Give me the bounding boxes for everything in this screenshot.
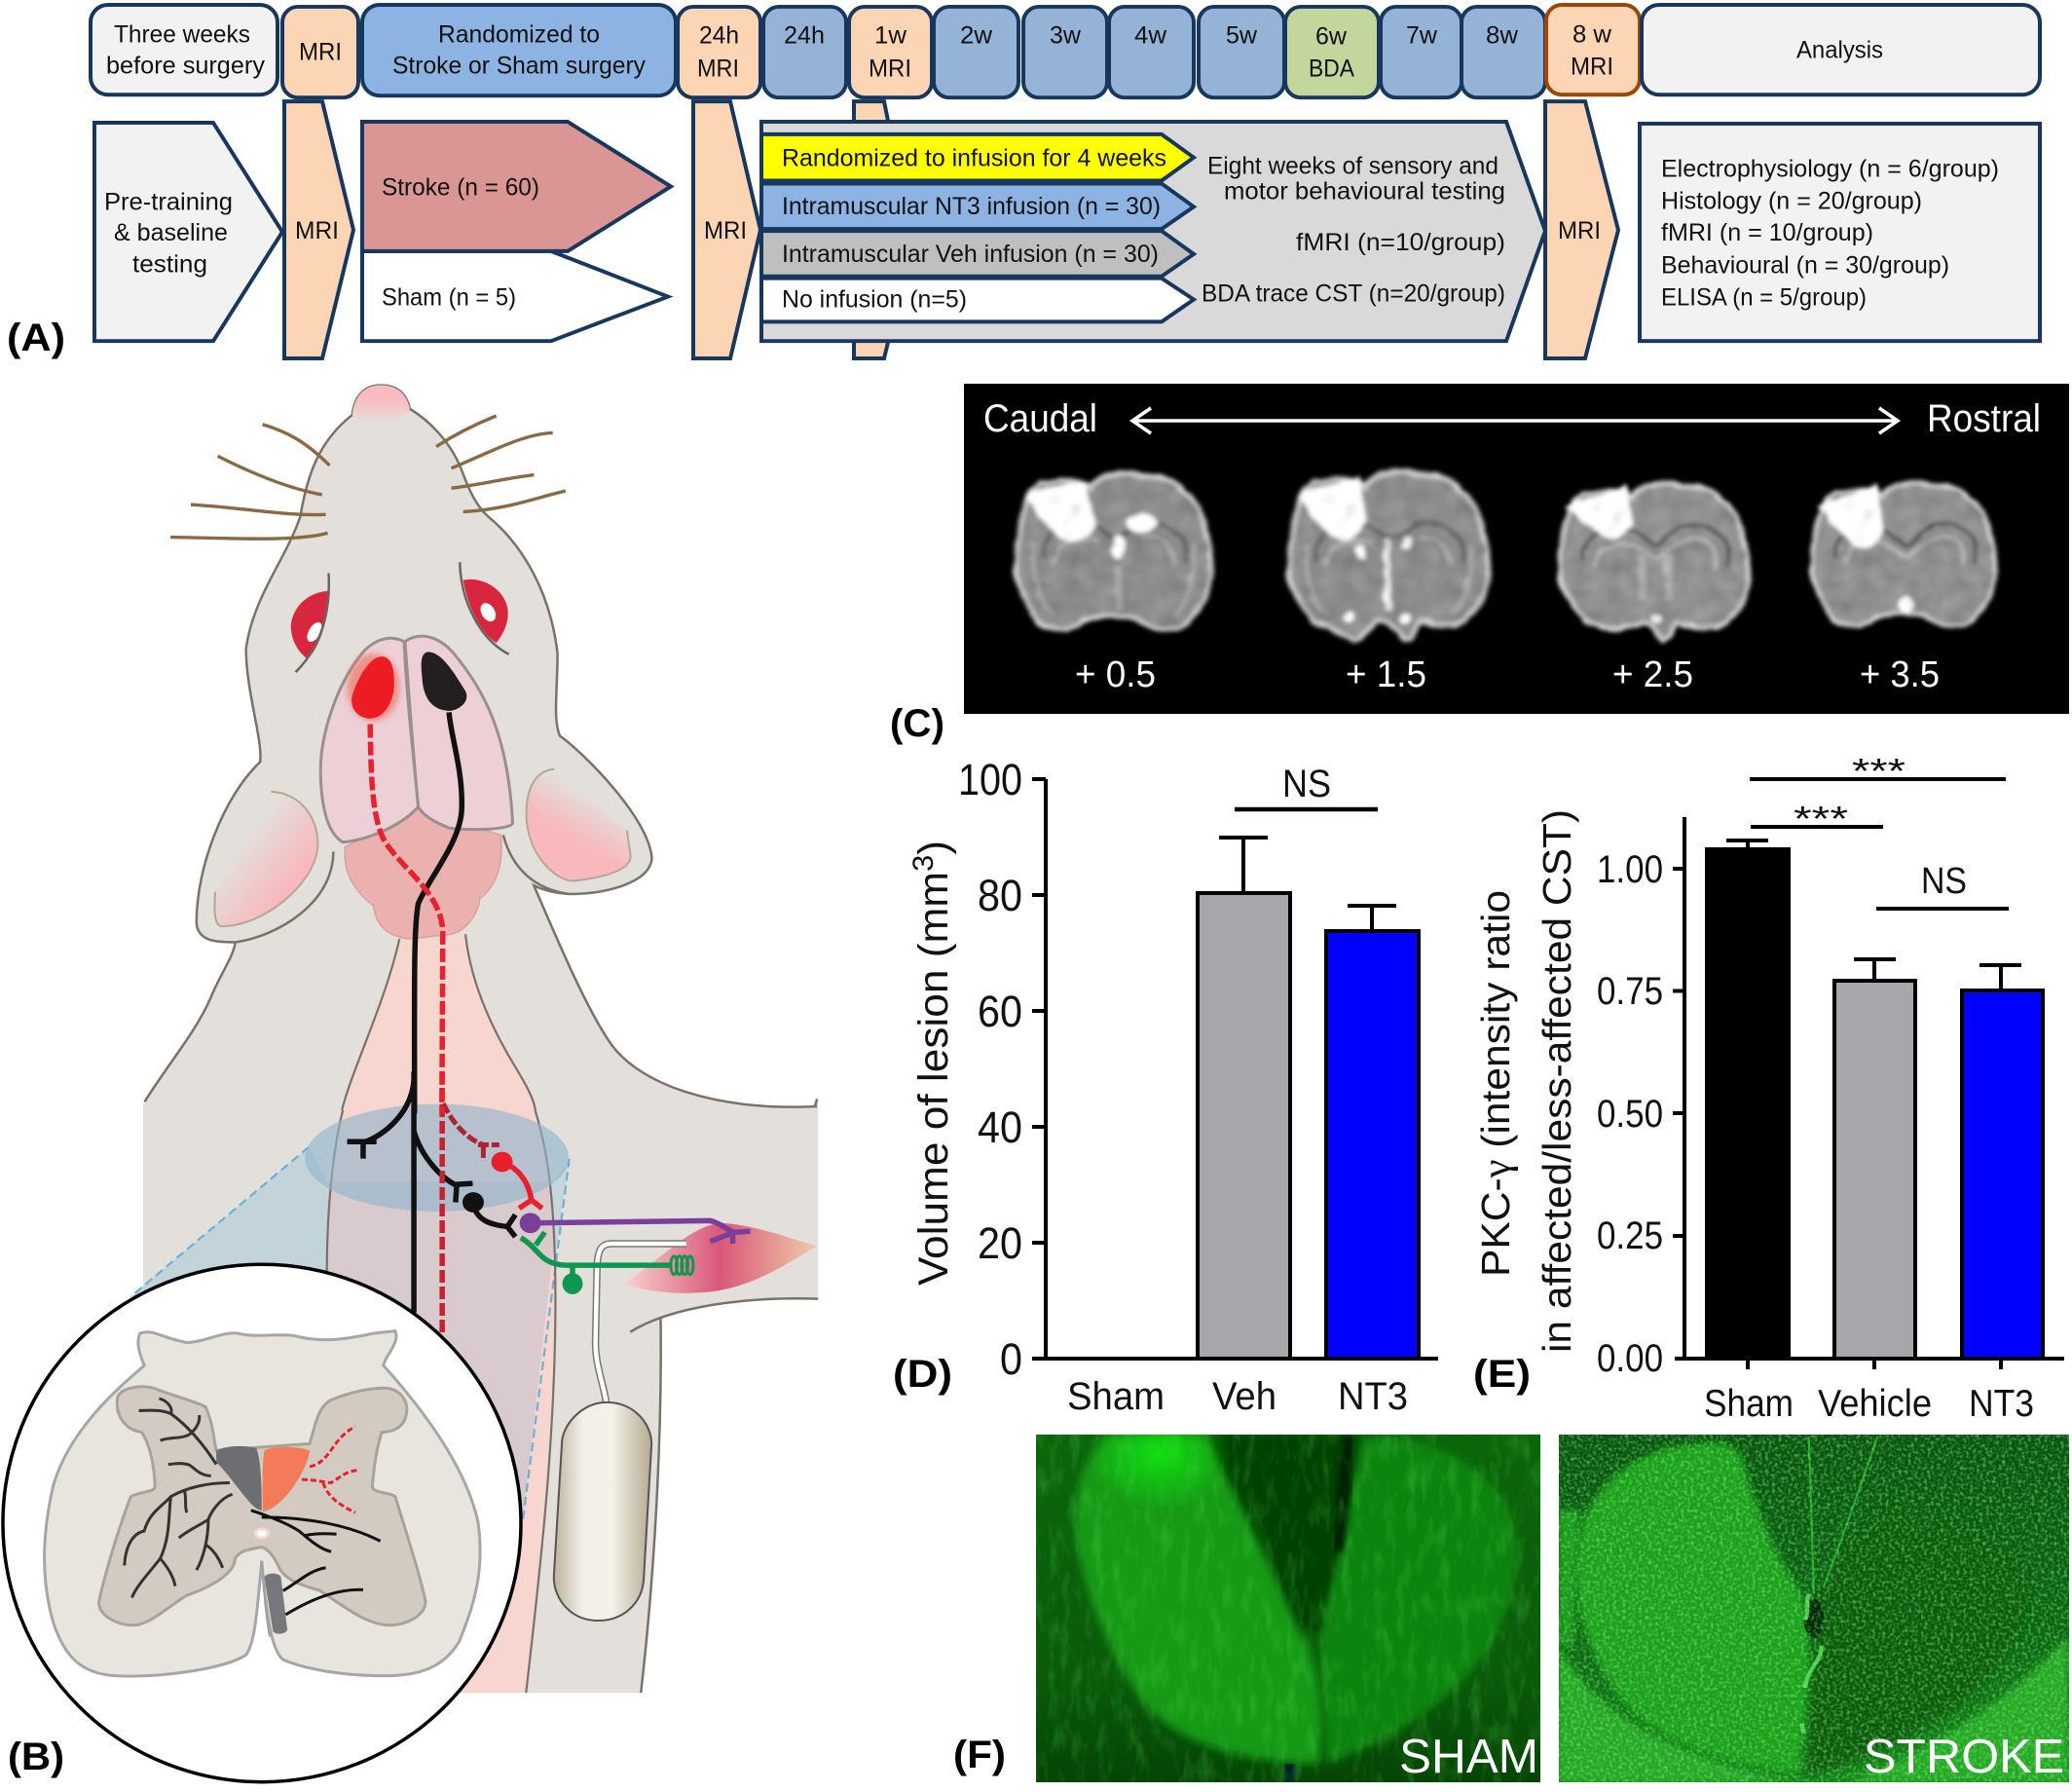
y tick labels: 80 xyxy=(978,871,1022,920)
infusion randomisation arrow xyxy=(761,134,1194,181)
pre-training arrow: testing xyxy=(132,251,207,279)
no infusion arrow: No infusion (n=5) xyxy=(782,286,967,313)
panel F: sham micrograph xyxy=(1036,1400,1540,1783)
intact motor cortex xyxy=(422,652,466,711)
timeline header row: BDA xyxy=(1309,55,1354,82)
caudal label: Caudal xyxy=(983,397,1097,440)
eight week testing block xyxy=(761,122,1545,341)
label B: (B) xyxy=(8,1736,64,1778)
MRI arrow 1: MRI xyxy=(295,217,339,244)
MRI arrow 2 xyxy=(693,101,760,358)
sham bar xyxy=(1707,840,1789,1359)
y tick labels: 0.75 xyxy=(1597,970,1663,1013)
vehicle infusion arrow: Intramuscular Veh infusion (n = 30) xyxy=(782,241,1159,268)
significance: sham vs NT3: *** xyxy=(1852,751,1906,791)
axes xyxy=(1032,779,1438,1359)
left cerebral hemisphere xyxy=(320,638,419,842)
timeline header row: MRI xyxy=(1571,53,1613,80)
y tick labels: 100 xyxy=(958,755,1022,804)
MRI arrow 3: MRI xyxy=(1558,217,1601,244)
NS bracket: NS xyxy=(1921,861,1967,902)
y axis title: Volume of lesion (mm xyxy=(910,883,957,1286)
category labels: Sham xyxy=(1704,1383,1794,1425)
NT3 infusion arrow xyxy=(761,183,1194,229)
timeline header row: 24h xyxy=(699,22,739,50)
category labels: Sham xyxy=(1067,1375,1165,1418)
category labels xyxy=(1067,1375,1408,1418)
rat lower body xyxy=(143,1071,818,1693)
MRI arrow 2: MRI xyxy=(704,217,747,244)
spinal cord cross-section xyxy=(45,1331,480,1676)
MRI arrow 3 xyxy=(1545,101,1618,358)
rat head and ears xyxy=(144,386,817,1113)
NT3 bar xyxy=(1962,965,2043,1359)
vehicle bar xyxy=(1198,838,1290,1359)
spinal cord neck xyxy=(327,1110,555,1693)
corticospinal tract in head and neck xyxy=(370,712,462,1113)
1w MRI arrow behind treatment block xyxy=(854,101,889,358)
y tick labels xyxy=(1597,848,1663,1380)
timeline header row: 7w xyxy=(1406,22,1438,50)
NS bracket xyxy=(1876,861,2009,909)
green sensory neuron xyxy=(521,1232,693,1294)
y tick labels: 1.00 xyxy=(1597,848,1663,891)
MRI arrow 1 xyxy=(284,101,353,358)
axes xyxy=(1673,817,2064,1369)
right eye xyxy=(460,562,509,654)
slice positions xyxy=(1075,654,1940,695)
category labels: Vehicle xyxy=(1818,1383,1932,1425)
infusion catheter xyxy=(596,1244,686,1402)
lesioned dorsal CST xyxy=(263,1447,310,1512)
timeline header row: 8w xyxy=(1486,22,1519,50)
grey matter xyxy=(98,1387,426,1625)
axon arbours xyxy=(125,1399,233,1597)
timeline header row: MRI xyxy=(299,39,342,65)
magnified spinal cord circle xyxy=(3,1264,521,1782)
timeline header row: Stroke or Sham surgery xyxy=(392,52,647,79)
y tick labels: 0 xyxy=(1000,1334,1022,1384)
intact dorsal CST xyxy=(216,1446,262,1511)
right ear inner xyxy=(527,769,631,881)
category labels xyxy=(1704,1383,2034,1425)
timeline header row: Analysis xyxy=(1796,37,1883,63)
y tick labels: 40 xyxy=(978,1102,1022,1152)
eight week testing block: Eight weeks of sensory and xyxy=(1207,153,1498,180)
analysis list: fMRI (n = 10/group) xyxy=(1661,219,1873,246)
slice positions: + 3.5 xyxy=(1860,654,1940,695)
timeline header row: MRI xyxy=(697,55,739,82)
y tick labels xyxy=(958,755,1022,1384)
category labels: NT3 xyxy=(1969,1383,2034,1425)
rat nose tip xyxy=(352,386,410,422)
infusion randomisation arrow: Randomized to infusion for 4 weeks xyxy=(782,145,1166,172)
stroke lesion xyxy=(347,653,400,722)
label C: (C) xyxy=(890,702,944,745)
right cerebral hemisphere xyxy=(405,636,513,830)
timeline header row: 24h xyxy=(784,22,825,50)
SHAM label: SHAM xyxy=(1399,1731,1538,1783)
forelimb muscle xyxy=(622,1223,817,1293)
whiskers xyxy=(170,416,566,539)
left eye xyxy=(291,573,329,672)
timeline header row: MRI xyxy=(869,55,911,82)
slice positions: + 2.5 xyxy=(1612,654,1693,695)
vehicle bar xyxy=(1834,959,1915,1359)
stroke arrow: Stroke (n = 60) xyxy=(382,173,539,201)
pre-training arrow: & baseline xyxy=(114,219,228,246)
significance: sham vs vehicle: *** xyxy=(1794,799,1848,839)
brainstem xyxy=(345,809,501,939)
category labels: Veh xyxy=(1212,1375,1276,1418)
timeline header row: 4w xyxy=(1134,22,1167,50)
timeline header row: 2w xyxy=(960,22,993,50)
sham arrow: Sham (n = 5) xyxy=(382,284,516,311)
slice positions: + 1.5 xyxy=(1346,654,1426,695)
timeline header row: 6w xyxy=(1315,23,1348,51)
y axis title xyxy=(1473,809,1579,1353)
label E: (E) xyxy=(1473,1353,1531,1396)
analysis list: Histology (n = 20/group) xyxy=(1661,187,1922,214)
y tick labels: 60 xyxy=(978,987,1022,1036)
throat xyxy=(341,934,536,1113)
y axis title: PKC-γ (intensity ratio xyxy=(1473,890,1518,1277)
rostral label: Rostral xyxy=(1927,397,2041,440)
y axis title: ) xyxy=(910,840,957,855)
analysis list: Electrophysiology (n = 6/group) xyxy=(1661,156,1999,183)
significance: sham vs vehicle xyxy=(1751,799,1883,839)
osmotic minipump xyxy=(554,1402,651,1621)
timeline header row: before surgery xyxy=(106,52,266,79)
y axis title: 3 xyxy=(907,855,940,872)
label F: (F) xyxy=(953,1734,1006,1776)
STROKE label: STROKE xyxy=(1864,1731,2064,1783)
analysis list: ELISA (n = 5/group) xyxy=(1661,284,1867,311)
pre-training arrow xyxy=(94,123,282,341)
y tick labels: 20 xyxy=(978,1218,1022,1268)
panel A: study timeline xyxy=(91,5,2040,358)
NT3 bar xyxy=(1326,906,1419,1359)
vehicle infusion arrow xyxy=(761,231,1194,277)
double-headed arrow xyxy=(1132,408,1898,433)
brain slice 4 xyxy=(1812,482,1995,626)
timeline header row: 3w xyxy=(1050,22,1082,50)
category labels: NT3 xyxy=(1338,1375,1408,1418)
timeline header row: Three weeks xyxy=(114,21,250,49)
timeline header row xyxy=(91,5,2040,97)
y tick labels: 0.25 xyxy=(1597,1214,1663,1257)
y tick labels: 0.00 xyxy=(1597,1337,1663,1380)
panel B: rat neuroanatomy illustration xyxy=(3,386,818,1782)
panel E: PKC-gamma bar chart xyxy=(1473,751,2064,1425)
y axis title: in affected/less-affected CST) xyxy=(1535,809,1579,1353)
eight week testing block: BDA trace CST (n=20/group) xyxy=(1202,280,1505,307)
spinal cord and connections xyxy=(3,1071,817,1782)
analysis list xyxy=(1640,124,2040,341)
left ear inner xyxy=(214,792,317,926)
sham arrow xyxy=(362,251,668,341)
brain slice 2 xyxy=(1289,470,1489,641)
eight week testing block: fMRI (n=10/group) xyxy=(1296,229,1505,256)
timeline header row: Randomized to xyxy=(438,21,600,49)
pre-training arrow: Pre-training xyxy=(104,188,233,215)
ventral CST xyxy=(265,1574,287,1634)
slice positions: + 0.5 xyxy=(1075,654,1156,695)
timeline header row: 5w xyxy=(1226,22,1258,50)
stroke arrow xyxy=(362,122,671,251)
label D: (D) xyxy=(893,1353,952,1396)
panel C: MRI slices xyxy=(964,384,2069,714)
panel F: stroke micrograph xyxy=(1559,1435,2069,1783)
y tick labels: 0.50 xyxy=(1597,1093,1663,1136)
central canal xyxy=(254,1527,270,1539)
label A: (A) xyxy=(7,317,65,359)
brain slice 1 xyxy=(1017,472,1211,630)
red lesioned axon xyxy=(442,1071,542,1333)
magnified section wedge xyxy=(130,1147,570,1693)
purple motor neuron xyxy=(520,1213,751,1244)
NS bracket: NS xyxy=(1282,763,1331,805)
brain slice 3 xyxy=(1560,482,1749,641)
no infusion arrow xyxy=(761,279,1194,321)
eight week testing block: motor behavioural testing xyxy=(1224,177,1505,205)
panel D: lesion volume bar chart xyxy=(907,755,1438,1418)
analysis list: Behavioural (n = 30/group) xyxy=(1661,252,1949,280)
timeline header row: 8 w xyxy=(1572,21,1612,49)
black corticospinal neuron xyxy=(348,1071,515,1313)
NT3 infusion arrow: Intramuscular NT3 infusion (n = 30) xyxy=(782,193,1161,220)
cervical region ellipse xyxy=(305,1104,569,1212)
timeline header row: 1w xyxy=(874,22,907,50)
